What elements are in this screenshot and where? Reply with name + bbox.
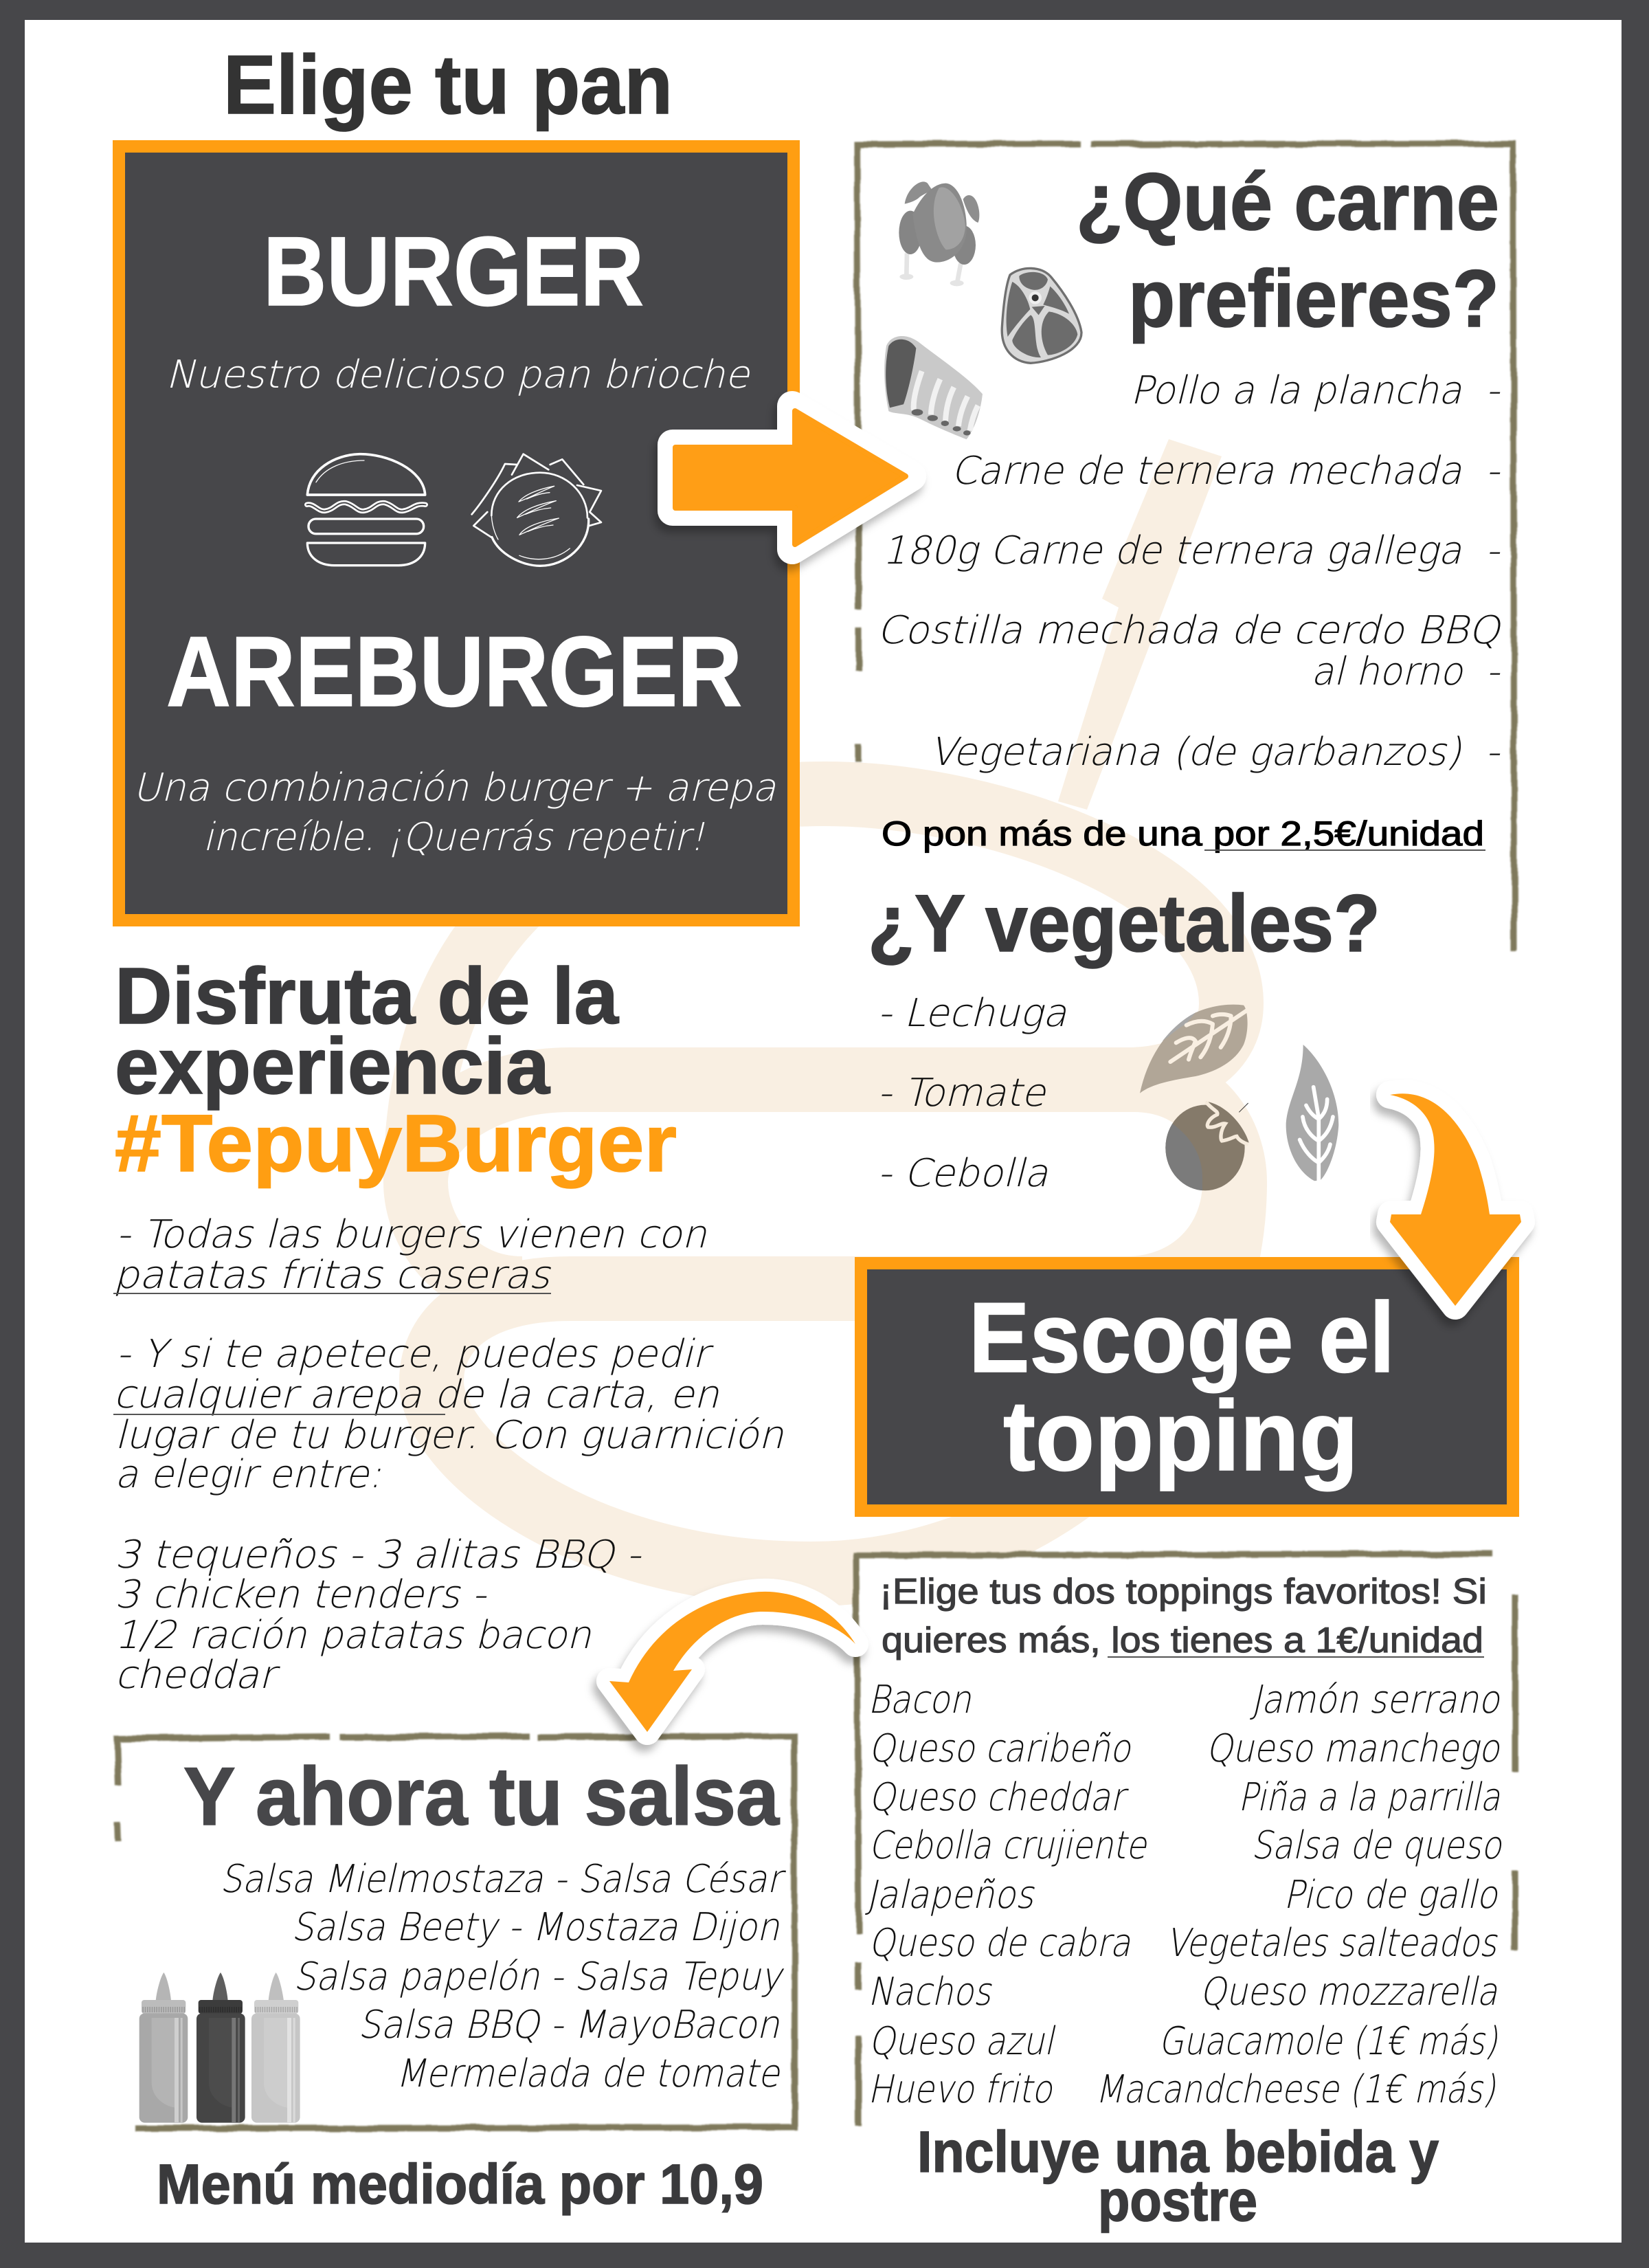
underline: patatas <box>113 1293 551 1294</box>
icon: sauce bottles <box>139 1972 300 2123</box>
topping: Queso mozzarella: Queso mozzarella <box>1200 1970 1498 2014</box>
meat: vegetariana: Vegetariana (de garbanzos) - <box>930 730 1501 775</box>
panel: bread choice <box>119 146 794 920</box>
body: line 7: 3 tequeños - 3 alitas BBQ - <box>115 1533 642 1577</box>
topping: Queso azul: Queso azul <box>868 2019 1056 2064</box>
topping: Pico de gallo: Pico de gallo <box>1283 1873 1499 1917</box>
meat: costilla line 1: Costilla mechada de cerdo BBQ <box>877 608 1502 653</box>
panel: disfruta text <box>113 951 784 1698</box>
icon: chicken <box>899 181 979 286</box>
white mask behind toppings panel <box>859 1555 1518 2242</box>
heading box <box>861 1263 1513 1511</box>
topping: Macandcheese: Macandcheese (1€ más) <box>1095 2067 1495 2112</box>
icon: arepa <box>472 454 601 566</box>
salsa line 5: Mermelada de tomate <box>396 2052 781 2096</box>
heading: Y ahora tu salsa: Y ahora tu salsa <box>183 1750 780 1843</box>
body: line 9: 1/2 ración patatas bacon <box>115 1613 591 1658</box>
topping: Queso caribeño: Queso caribeño <box>868 1726 1132 1771</box>
heading: experiencia: experiencia <box>115 1021 550 1111</box>
topping: Jalapeños: Jalapeños <box>864 1873 1035 1917</box>
text: areburger description line 1: Una combinación burger + arepa <box>133 766 776 810</box>
icon: leaf 2 <box>1286 1045 1338 1181</box>
salsa line 1: Salsa Mielmostaza - Salsa César <box>220 1857 786 1902</box>
panel: meat frame <box>857 144 1514 952</box>
meat: costilla line 2: al horno - <box>1311 649 1501 694</box>
text: includes drink line 1: Incluye una bebida y <box>917 2120 1439 2184</box>
background watermark <box>416 439 1235 1574</box>
topping: Jamón serrano: Jamón serrano <box>1249 1678 1501 1722</box>
arrow: curved down <box>1390 1093 1521 1306</box>
panel: salsa frame <box>117 1736 794 2128</box>
underline: arepa <box>113 1414 445 1415</box>
note: extra meat price: O pon más de una por 2,5€/unidad <box>882 814 1484 853</box>
label: AREBURGER: AREBURGER <box>166 616 742 727</box>
icon: ribs <box>884 336 983 439</box>
heading: Qué carne: ¿Qué carne <box>1076 157 1499 247</box>
body: line 4: cualquier arepa de la carta, en <box>113 1372 719 1417</box>
arrow: right <box>673 406 911 549</box>
body: line 8: 3 chicken tenders - <box>115 1572 487 1617</box>
topping: Queso cheddar: Queso cheddar <box>868 1775 1129 1820</box>
panel: toppings frame <box>856 1554 1515 2126</box>
body: patatas underlined: patatas fritas caseras <box>113 1253 552 1298</box>
veg: lechuga: - Lechuga <box>877 991 1067 1036</box>
topping: Queso de cabra: Queso de cabra <box>868 1921 1131 1966</box>
topping: Nachos: Nachos <box>868 1970 992 2014</box>
text: burger description: Nuestro delicioso pan brioche <box>166 353 751 397</box>
text: includes drink line 2: postre <box>1098 2168 1257 2233</box>
heading: Elige tu pan: Elige tu pan <box>223 38 673 131</box>
text: areburger description line 2: increíble. ¡Querrás repetir! <box>203 815 705 860</box>
label: BURGER: BURGER <box>263 217 644 326</box>
intro line 1: ¡Elige tus dos toppings favoritos! Si <box>879 1572 1487 1612</box>
meat: ternera gallega: 180g Carne de ternera gallega - <box>882 529 1501 573</box>
icon: leaf 1 <box>1140 1005 1248 1093</box>
salsa line 2: Salsa Beety - Mostaza Dijon <box>291 1905 779 1950</box>
body: line 6: a elegir entre: <box>115 1452 381 1497</box>
heading: hashtag: #TepuyBurger <box>115 1098 677 1189</box>
underline: 1 euro <box>1108 1656 1484 1658</box>
salsa line 3: Salsa papelón - Salsa Tepuy <box>293 1955 784 1999</box>
icon: tomato <box>1165 1102 1249 1190</box>
topping: Cebolla crujiente: Cebolla crujiente <box>868 1823 1147 1868</box>
topping: Vegetales salteados: Vegetales salteados <box>1166 1921 1498 1966</box>
icon: steak <box>1002 268 1081 363</box>
heading: Disfruta de la: Disfruta de la <box>115 951 619 1041</box>
arrow: curved to salsa <box>609 1592 855 1732</box>
body: line 1: - Todas las burgers vienen con <box>116 1212 707 1257</box>
text: menu price: Menú mediodía por 10,9 <box>157 2153 763 2216</box>
topping: Queso manchego: Queso manchego <box>1206 1726 1501 1771</box>
intro line 2: quieres más, los tienes a 1€/unidad <box>882 1621 1483 1660</box>
meat: pollo: Pollo a la plancha - <box>1130 368 1501 413</box>
heading: Y vegetales: ¿Y vegetales? <box>868 878 1380 969</box>
underline: price <box>1204 849 1485 851</box>
panel: meat options <box>877 157 1502 853</box>
veg: tomate: - Tomate <box>877 1071 1047 1115</box>
panel: vegetables <box>877 991 1338 1196</box>
panel box <box>119 146 794 920</box>
heading: topping: topping <box>1003 1380 1358 1491</box>
topping: Salsa de queso: Salsa de queso <box>1251 1823 1502 1868</box>
topping: Piña a la parrilla: Piña a la parrilla <box>1238 1775 1501 1820</box>
salsa line 4: Salsa BBQ - MayoBacon <box>358 2003 779 2047</box>
heading: prefieres: prefieres? <box>1128 254 1499 344</box>
icon: burger <box>307 454 425 566</box>
divider: vegetables bottom line <box>893 1229 1402 1234</box>
heading: Escoge el: Escoge el <box>969 1282 1395 1393</box>
topping: Huevo frito: Huevo frito <box>868 2067 1053 2112</box>
body: line 10: cheddar <box>115 1653 280 1698</box>
meat: ternera mechada: Carne de ternera mechada - <box>951 449 1501 493</box>
panel: topping heading <box>861 1263 1513 1511</box>
topping: Guacamole: Guacamole (1€ más) <box>1158 2019 1497 2064</box>
veg: cebolla: - Cebolla <box>877 1151 1048 1196</box>
panel: toppings list <box>864 1572 1502 2112</box>
topping: Bacon: Bacon <box>868 1678 971 1722</box>
body: line 5: lugar de tu burger. Con guarnición <box>115 1413 784 1458</box>
panel: salsa <box>139 1750 786 2123</box>
body: line 3: - Y si te apetece, puedes pedir <box>116 1332 714 1377</box>
